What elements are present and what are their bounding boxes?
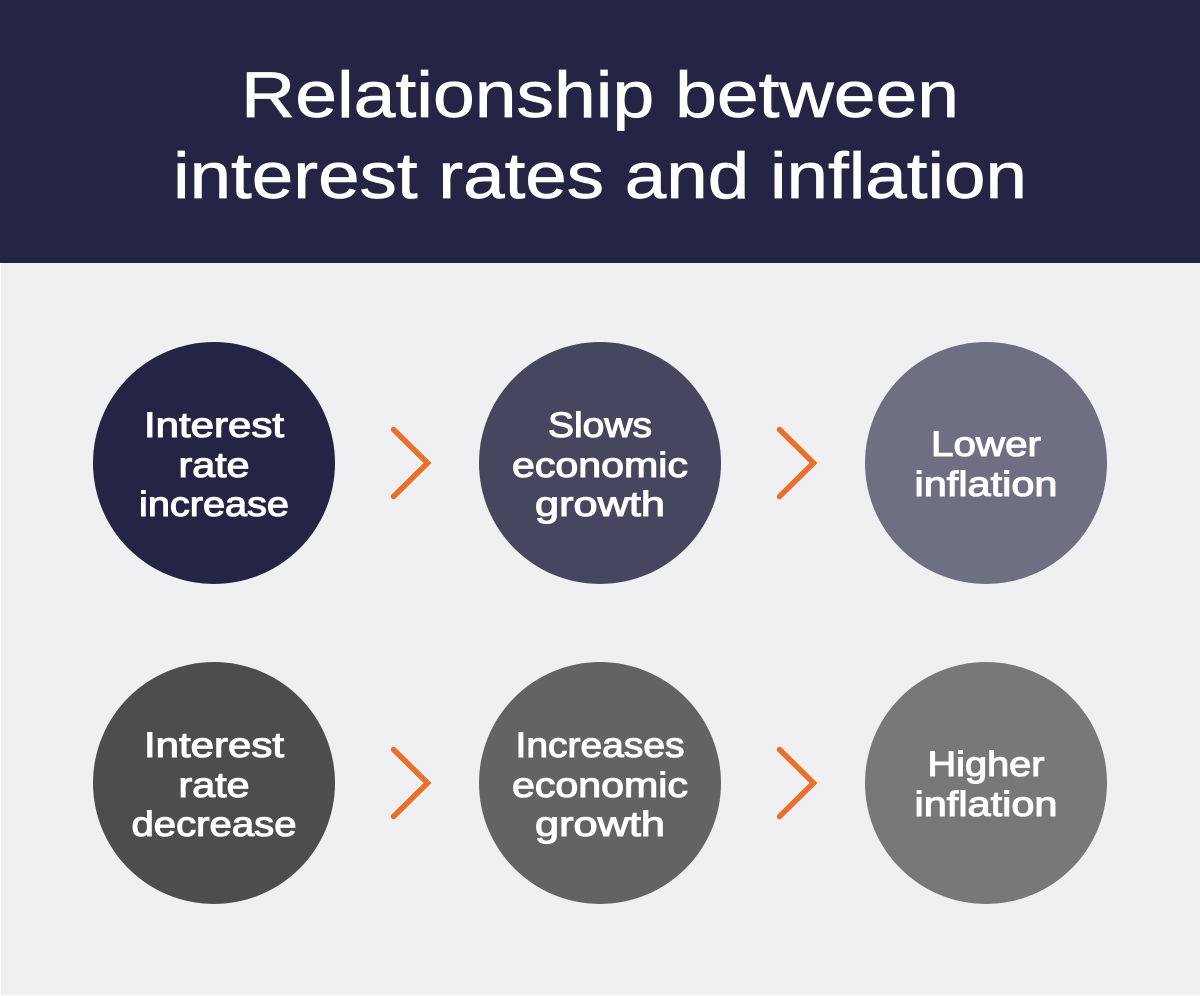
circle: interest rate increase: rate <box>178 446 250 485</box>
circle: higher inflation: inflation <box>914 785 1058 824</box>
circle: slows economic growth: Slows <box>548 406 652 445</box>
circle: increases economic growth: economic <box>512 766 688 805</box>
circle: interest rate decrease <box>93 662 335 904</box>
circle: lower inflation: inflation <box>914 465 1058 504</box>
circle: higher inflation <box>865 662 1107 904</box>
circle: interest rate increase <box>93 342 335 584</box>
circle: higher inflation: Higher <box>928 745 1045 784</box>
title <box>173 58 1027 212</box>
header band <box>0 0 1200 263</box>
circle: slows economic growth: economic <box>512 446 688 485</box>
circle: interest rate decrease: Interest <box>144 726 284 765</box>
arrow <box>780 430 814 496</box>
arrow <box>780 750 814 816</box>
circle: slows economic growth: growth <box>535 485 665 524</box>
circle: increases economic growth: Increases <box>516 726 684 765</box>
circle: increases economic growth: growth <box>535 805 665 844</box>
circle: lower inflation <box>865 342 1107 584</box>
circle: interest rate increase: Interest <box>144 406 284 445</box>
circle: slows economic growth <box>479 342 721 584</box>
arrow <box>394 430 428 496</box>
title: Relationship between <box>241 58 959 131</box>
circle: interest rate decrease: decrease <box>132 805 296 844</box>
arrow <box>394 750 428 816</box>
circle: increases economic growth <box>479 662 721 904</box>
circle: lower inflation: Lower <box>931 425 1041 464</box>
circle: interest rate increase: increase <box>139 485 289 524</box>
title: interest rates and inflation <box>173 139 1027 212</box>
background panel <box>1 263 1200 995</box>
circle: interest rate decrease: rate <box>178 766 250 805</box>
